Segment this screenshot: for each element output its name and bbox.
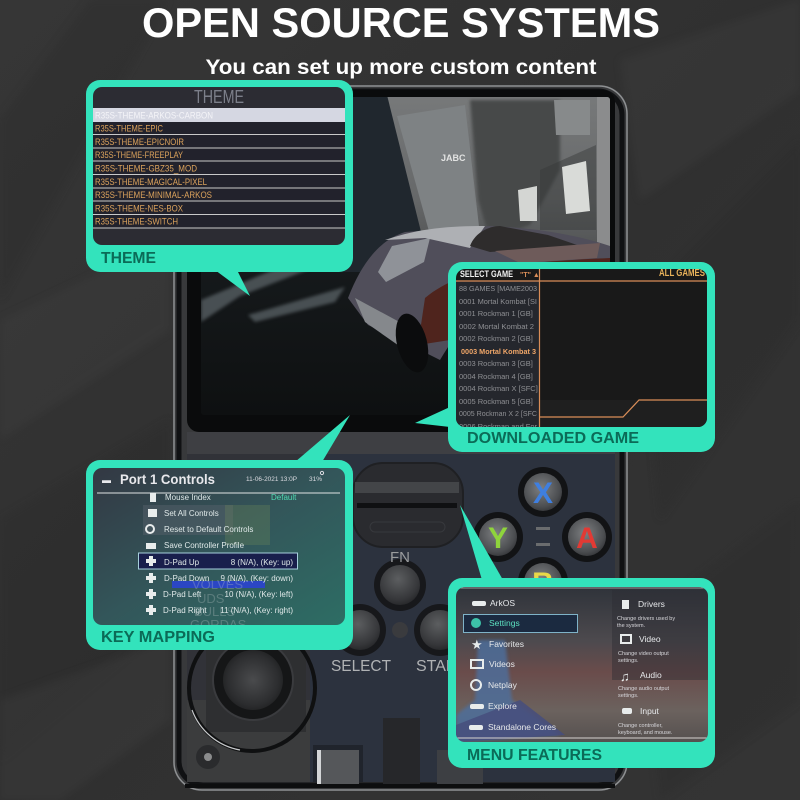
- game list: 0003 Mortal Kombat 3: [461, 347, 536, 356]
- controls screen: 31%: [309, 476, 322, 483]
- function buttons: [331, 549, 467, 675]
- theme list: R35S-THEME-NES-BOX: [95, 204, 183, 214]
- face buttons: [473, 467, 612, 607]
- menu screen: Change controller,: [618, 723, 663, 729]
- controls screen: Set All Controls: [164, 509, 219, 518]
- theme list: R35S-THEME-SWITCH: [95, 216, 178, 226]
- panel: theme: [86, 80, 353, 296]
- game list: 0003 Rockman 3 [GB]: [459, 359, 533, 368]
- function buttons: START: [416, 658, 467, 675]
- controls screen: Mouse Index: [165, 493, 211, 502]
- game list: 0002 Mortal Kombat 2: [459, 322, 534, 331]
- game list: ALL GAMES: [659, 268, 705, 279]
- panel: key mapping: [86, 415, 353, 650]
- buildings: [340, 97, 610, 272]
- theme list: R35S-THEME-GBZ35_MOD: [95, 164, 197, 174]
- speaker grille: [353, 463, 463, 547]
- menu screen: Audio: [640, 670, 662, 680]
- controls screen: Port 1 Controls: [120, 471, 215, 487]
- menu screen: Netplay: [488, 680, 518, 690]
- menu screen: Change video output: [618, 651, 669, 657]
- controls screen: 9 (N/A), (Key: down): [221, 574, 293, 583]
- theme list: R35S-THEME-MINIMAL-ARKOS: [95, 190, 212, 200]
- controls screen: D-Pad Down: [164, 574, 209, 583]
- controls screen: Default: [271, 493, 297, 502]
- menu screen: settings.: [618, 658, 639, 664]
- panel label: KEY MAPPING: [101, 629, 215, 646]
- menu screen: Drivers: [638, 599, 665, 609]
- face buttons: A: [576, 522, 598, 555]
- game list: 0004 Rockman X [SFC]: [459, 384, 538, 393]
- controls screen: GORDAS: [190, 617, 247, 632]
- menu screen: [456, 587, 708, 742]
- menu screen: settings.: [618, 693, 639, 699]
- controls screen: BULLS: [194, 604, 236, 619]
- controls screen: 10 (N/A), (Key: left): [225, 590, 293, 599]
- game list: 0004 Rockman 4 [GB]: [459, 372, 533, 381]
- menu screen: Video: [639, 634, 661, 644]
- menu screen: Favorites: [489, 639, 524, 649]
- panel: menu features: [448, 505, 715, 768]
- menu screen: Videos: [489, 659, 515, 669]
- game list: SELECT GAME: [460, 269, 513, 279]
- panel frame: [448, 262, 715, 452]
- menu screen: Input: [640, 706, 660, 716]
- face buttons: X: [533, 477, 553, 510]
- controls screen: Reset to Default Controls: [164, 525, 253, 534]
- controls screen: D-Pad Up: [164, 558, 200, 567]
- screen bezel: [187, 90, 615, 432]
- menu screen: Standalone Cores: [488, 722, 556, 732]
- menu screen: ★: [471, 637, 483, 652]
- panel label: DOWNLOADED GAME: [467, 430, 639, 447]
- theme list: R35S-THEME-ARKOS-CARBON: [95, 110, 213, 120]
- game list: 0005 Rockman 5 [GB]: [459, 397, 533, 406]
- menu screen: Explore: [488, 701, 517, 711]
- controls screen: D-Pad Left: [163, 590, 202, 599]
- function buttons: SELECT: [331, 658, 391, 675]
- game screen: [201, 97, 610, 370]
- subtitle: You can set up more custom content: [206, 56, 596, 79]
- face buttons: Y: [488, 522, 508, 555]
- panel frame: [86, 460, 353, 650]
- controls screen: UDS: [197, 591, 225, 606]
- face buttons: B: [532, 567, 554, 600]
- game list: "T" ▲: [520, 272, 540, 279]
- panel: downloaded game: [415, 262, 715, 452]
- theme list: R35S-THEME-MAGICAL-PIXEL: [95, 177, 207, 187]
- menu screen: Change audio output: [618, 686, 670, 692]
- controls screen: 11-06-2021 13:0P: [246, 476, 297, 483]
- callout pointer: [295, 415, 350, 462]
- controls screen: VOLVES: [192, 577, 243, 592]
- game list: 0002 Rockman 2 [GB]: [459, 334, 533, 343]
- callout pointer: [460, 505, 503, 580]
- panel label: MENU FEATURES: [467, 747, 602, 764]
- console body: [173, 85, 628, 791]
- game list: 0006 Rockman and For: [459, 422, 537, 431]
- menu screen: the system.: [617, 623, 646, 629]
- handheld console: [173, 85, 628, 791]
- panel frame: [448, 578, 715, 768]
- controls screen: 8 (N/A), (Key: up): [231, 558, 293, 567]
- menu screen: ArkOS: [490, 598, 515, 608]
- menu screen: ♫: [620, 669, 630, 684]
- theme list: [93, 87, 345, 245]
- callout pointer: [415, 407, 450, 427]
- title: OPEN SOURCE SYSTEMS: [142, 0, 660, 46]
- game list: 0005 Rockman X 2 [SFC: [459, 409, 538, 418]
- controls screen: D-Pad Right: [163, 606, 207, 615]
- car: [348, 226, 610, 376]
- function buttons: FN: [390, 549, 410, 566]
- joystick: [189, 625, 315, 751]
- road markings: [201, 272, 345, 323]
- theme list: R35S-THEME-EPICNOIR: [95, 137, 184, 147]
- theme list: R35S-THEME-FREEPLAY: [95, 150, 183, 160]
- theme list: R35S-THEME-EPIC: [95, 124, 163, 134]
- game list: 0001 Rockman 1 [GB]: [459, 309, 533, 318]
- game list: [456, 268, 707, 431]
- theme list: THEME: [194, 87, 244, 107]
- callout pointer: [215, 270, 250, 296]
- buildings: JABC: [441, 153, 466, 163]
- panel frame: [86, 80, 353, 272]
- menu screen: keyboard, and mouse.: [618, 730, 673, 736]
- controls screen: 11 (N/A), (Key: right): [220, 606, 293, 615]
- controls screen: Save Controller Profile: [164, 541, 245, 550]
- menu screen: Settings: [489, 618, 520, 628]
- bottom ports: [185, 718, 615, 788]
- controls screen: [93, 468, 345, 632]
- game list: 0001 Mortal Kombat [SI: [459, 297, 537, 306]
- panel label: THEME: [101, 250, 156, 267]
- game list: 88 GAMES [MAME2003: [459, 284, 537, 293]
- menu screen: Change drivers used by: [617, 616, 675, 622]
- controls screen: ▬: [102, 475, 111, 485]
